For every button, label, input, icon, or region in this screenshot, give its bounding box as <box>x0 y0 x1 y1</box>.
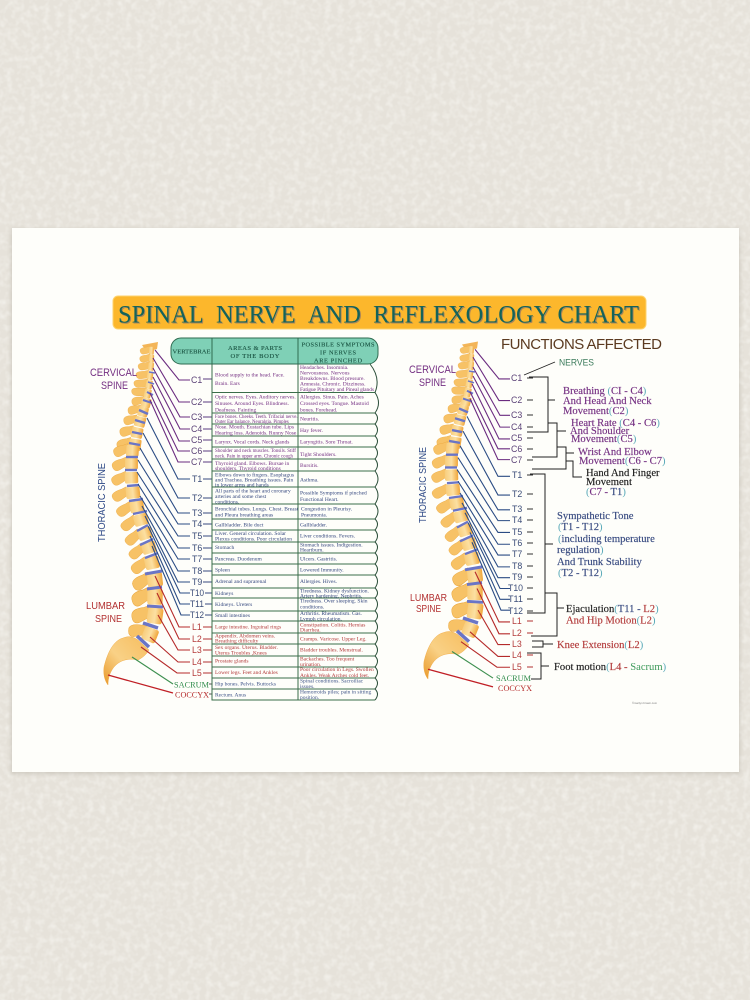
label: cervical spine left: CERVICAL <box>90 367 137 379</box>
table text: cervical rows: bones. Forehead. <box>300 408 338 414</box>
label: cervical spine right: CERVICAL <box>409 364 456 376</box>
table text: thoracic rows: Bronchial tubes. Lungs. Chest. Breast <box>215 506 299 512</box>
left vertebra labels: L5 <box>192 668 202 678</box>
function: wrist and elbow: Movement(C6 - C7) <box>579 456 666 467</box>
left spine illustration <box>104 342 164 685</box>
table header: ARE PINCHED <box>314 358 362 364</box>
function: hand and finger <box>586 468 660 498</box>
table text: thoracic rows: arteries and some chest <box>215 494 267 500</box>
table grid <box>212 364 375 700</box>
right vertebra labels: T8 <box>512 561 522 571</box>
table text: cervical rows <box>215 365 374 472</box>
table text: lumbar and sacral rows: Appendix. Abdomen veins. <box>215 634 276 640</box>
label: lumbar spine right: LUMBAR <box>410 593 447 604</box>
table text: cervical rows: shoulders. Thyroid conditions <box>215 466 281 472</box>
left vertebra labels: COCCYX <box>175 690 209 700</box>
table text: lumbar and sacral rows: Bladder troubles. Menstrual. <box>300 648 364 654</box>
label: lumbar spine left <box>86 600 125 625</box>
left vertebra labels: T3 <box>192 508 202 518</box>
right vertebra labels: T5 <box>512 527 522 537</box>
table text: thoracic rows <box>215 472 369 622</box>
function: breathing: Movement(C2) <box>563 406 629 417</box>
table text: cervical rows: Hay fever. <box>300 427 324 434</box>
left vertebra labels: T4 <box>192 519 202 529</box>
table text: thoracic rows: Small intestines <box>215 613 250 619</box>
right vertebra labels: L2 <box>512 628 522 638</box>
right vertebra labels: T6 <box>512 538 522 548</box>
table text: thoracic rows: Allergies. Hives. <box>300 579 338 585</box>
table text: cervical rows: Allergies. Sinus. Pain. Aches <box>300 394 364 400</box>
left vertebra labels: C4 <box>191 424 202 434</box>
table text: cervical rows: Shoulder and neck muscles. Tonsils. Stiff <box>215 449 296 454</box>
table text: thoracic rows: Possible Symptoms if pinched <box>300 490 367 496</box>
label: lumbar spine right: SPINE <box>416 604 441 615</box>
function: breathing: And Head And Neck <box>563 396 652 407</box>
table text: thoracic rows: Tiredness. Over sleeping. Skin <box>300 598 368 604</box>
label: cervical spine left <box>90 367 137 392</box>
table text: cervical rows: Crossed eyes. Tongue. Mastoid <box>300 401 369 407</box>
heading: functions affected: FUNCTIONS AFFECTED <box>501 336 662 353</box>
table: areas and symptoms: Hemorroids piles; pain in sitting <box>300 690 371 696</box>
table text: thoracic rows: Functional Heart. <box>300 497 339 503</box>
table text: lumbar and sacral rows: Cramps. Varicose. Upper Leg. <box>300 636 367 642</box>
table text: thoracic rows: Kidneys. Ureters <box>215 602 252 608</box>
table text: lumbar and sacral rows: Diarrhea. <box>300 628 321 634</box>
table text: thoracic rows: All parts of the heart and coronary <box>215 488 291 494</box>
table text: thoracic rows: Pancreas. Duodenum <box>215 556 262 562</box>
right spine illustration <box>424 342 484 679</box>
label: thoracic spine right: THORACIC SPINE <box>417 447 429 523</box>
left vertebra labels: T10 <box>190 588 204 598</box>
left vertebra labels: L4 <box>192 657 202 667</box>
function: breathing <box>563 386 652 417</box>
table text: cervical rows: Breakdowns. Blood pressure. <box>300 376 365 382</box>
table text: thoracic rows: Asthma. <box>300 478 319 484</box>
table text: lumbar and sacral rows: Uterus Troubles ,Knees <box>215 650 267 656</box>
table: areas and symptoms: issues. <box>300 684 315 690</box>
table text: cervical rows: Deafness. Fainting <box>215 406 256 414</box>
right vertebra labels: L4 <box>512 650 522 660</box>
table text: thoracic rows: and Pleura breathing areas <box>215 512 273 518</box>
table text: cervical rows: Optic nerves. Eyes. Auditory nerves. <box>215 394 296 400</box>
table header: AREAS & PARTS <box>228 345 282 352</box>
left vertebra labels: T6 <box>192 543 202 553</box>
right vertebra labels: C6 <box>511 444 522 454</box>
table text: thoracic rows: Elbows down to fingers. Esophagus <box>215 472 294 478</box>
small credit: ©martyn brown.com <box>632 701 658 705</box>
right vertebra labels: T7 <box>512 549 522 559</box>
table text: thoracic rows: Pneumonia. <box>301 512 328 518</box>
function: ejaculation and hip motion <box>566 604 659 626</box>
right vertebra labels <box>496 373 532 693</box>
title banner: SPINAL NERVE AND REFLEXOLOGY CHART <box>119 302 640 330</box>
function: ejaculation and hip motion: Ejaculation(T11 - L2) <box>566 604 659 615</box>
table text: thoracic rows: Ulcers. Gastritis. <box>300 556 338 562</box>
function: heart rate: Heart Rate (C4 - C6) <box>571 418 660 429</box>
table text: lumbar and sacral rows: Ankles. Weak Arches cold feet. <box>300 672 370 679</box>
table text: thoracic rows: Congestion in Pleurisy. <box>301 506 353 512</box>
left vertebra labels: C7 <box>191 457 202 467</box>
function: sympathetic tone: regulation) <box>557 545 604 556</box>
left vertebra labels: SACRUM <box>174 680 209 690</box>
table text: cervical rows: Amnesia. Chronic. Dizziness. <box>300 382 366 388</box>
left vertebra labels: L3 <box>192 645 202 655</box>
right nerve lines <box>428 349 510 687</box>
table text: lumbar and sacral rows: Prostate glands <box>215 658 248 664</box>
left vertebra labels: C1 <box>191 375 202 385</box>
right vertebra labels: T1 <box>512 470 522 480</box>
label: thoracic spine left: THORACIC SPINE <box>96 463 108 542</box>
function: sympathetic tone: (T2 - T12) <box>558 568 603 579</box>
table: areas and symptoms <box>171 338 378 701</box>
right vertebra labels: T9 <box>512 572 522 582</box>
table text: thoracic rows: Gallbladder. <box>300 522 328 528</box>
left vertebra labels: C2 <box>191 397 202 407</box>
table text: cervical rows: Face bones. Cheeks. Teeth. Trifacial nerve. <box>215 415 298 420</box>
table text: thoracic rows: Spleen <box>215 568 230 574</box>
table header <box>171 338 378 364</box>
table text: cervical rows: Thyroid gland. Elbows. Bursae in <box>215 461 289 467</box>
table text: cervical rows: Larynx. Vocal cords. Neck glands <box>215 440 289 446</box>
left vertebra labels <box>174 375 212 700</box>
left vertebra labels: L1 <box>192 622 202 632</box>
left vertebra labels: T8 <box>192 566 202 576</box>
table header: IF NERVES <box>320 350 356 356</box>
function: sympathetic tone: Sympathetic Tone <box>557 511 634 522</box>
label: lumbar spine left: LUMBAR <box>86 600 125 612</box>
table header: POSSIBLE SYMPTOMS <box>302 342 375 348</box>
table text: cervical rows: Headaches. Insomnia. <box>300 365 349 371</box>
left vertebra labels: T9 <box>192 577 202 587</box>
right vertebra labels: C4 <box>511 422 522 432</box>
table text: thoracic rows: and Trachea. Breathing issues. Pain <box>215 478 293 484</box>
table text: lumbar and sacral rows <box>215 622 374 679</box>
table: areas and symptoms: Hip bones. Pelvis. Buttocks <box>215 682 276 688</box>
table text: thoracic rows: Stomach issues. Indigestion. <box>300 542 363 548</box>
label: lumbar spine right <box>410 593 447 615</box>
right vertebra labels: T11 <box>508 594 523 604</box>
right vertebra labels: L1 <box>512 616 522 626</box>
table text: thoracic rows: Artery hardening. Nephritis. <box>300 594 363 600</box>
table text: thoracic rows: Kidneys <box>215 591 233 597</box>
function: hand and finger: (C7 - T1) <box>586 487 626 498</box>
left nerve lines <box>108 350 190 693</box>
table text: thoracic rows: Liver conditions. Fevers. <box>300 534 356 540</box>
right vertebra labels: T10 <box>508 583 523 593</box>
table header: VERTEBRAE <box>172 348 211 356</box>
left vertebra labels: C6 <box>191 446 202 456</box>
table text: cervical rows: Blood supply to the head. Face. <box>215 372 285 378</box>
right vertebra labels: T3 <box>512 504 522 514</box>
table text: cervical rows: Hearing loss. Adenoids. Runny Nose <box>215 430 297 436</box>
table text: cervical rows: neck. Pain in upper arm. Chronic cough <box>215 454 294 460</box>
table text: lumbar and sacral rows: Poor circulation in Legs. Swollen <box>300 667 374 673</box>
table: areas and symptoms: position. <box>300 695 320 701</box>
nerves callout <box>524 358 594 375</box>
left vertebra labels: T2 <box>192 493 202 503</box>
label: lumbar spine left: SPINE <box>95 613 122 625</box>
left vertebra labels: C5 <box>191 435 202 445</box>
function labels <box>554 386 667 673</box>
function: hand and finger: Movement <box>586 477 632 488</box>
function: sympathetic tone: (including temperature <box>558 534 655 545</box>
table text: lumbar and sacral rows: Constipation. Colitis. Hernias <box>300 622 365 628</box>
table: areas and symptoms: Rectum. Anus <box>215 692 246 698</box>
label: cervical spine right: SPINE <box>419 377 446 389</box>
function brackets <box>527 377 582 679</box>
table text: thoracic rows: Lymph circulation. <box>300 616 342 622</box>
left vertebra labels: T5 <box>192 531 202 541</box>
table text: thoracic rows: conditions. <box>300 604 325 610</box>
function: wrist and elbow <box>578 447 666 467</box>
nerves callout: NERVES <box>559 358 594 368</box>
table text: cervical rows: Fatigue Pituitary and Pineal glands <box>300 387 374 393</box>
table text: cervical rows: Sinuses. Around Eyes. Blindness. <box>215 401 290 407</box>
function: sympathetic tone: (T1 - T12) <box>558 522 603 533</box>
table text: cervical rows: Nervousness. Nervous <box>300 370 350 376</box>
table text: thoracic rows: in lower arms and hands <box>215 482 269 488</box>
function: breathing: Breathing (CI - C4) <box>563 386 647 397</box>
table header: OF THE BODY <box>230 353 280 360</box>
right vertebra labels: C2 <box>511 395 522 405</box>
table text: cervical rows: Tight Shoulders. <box>300 452 337 458</box>
table text: cervical rows: Nose. Mouth. Eustachian tube. Lips <box>215 424 294 430</box>
label: cervical spine right <box>409 364 456 389</box>
table text: lumbar and sacral rows: Sex organs. Uterus. Bladder. <box>215 645 278 651</box>
right vertebra labels: C1 <box>511 373 522 383</box>
right vertebra labels: L5 <box>512 662 522 672</box>
right vertebra labels: T2 <box>512 489 522 499</box>
table text: thoracic rows: Adrenal and suprarenal <box>215 579 267 585</box>
table: areas and symptoms: Spinal conditions. Sacroiliac <box>300 678 364 684</box>
table text: thoracic rows: Plexus conditions. Poor circulation <box>215 536 292 542</box>
table text: thoracic rows: Gallbladder. Bile duct <box>215 522 264 528</box>
left vertebra labels: T7 <box>192 554 202 564</box>
table text: thoracic rows: Heartburn. <box>300 548 324 554</box>
table text: thoracic rows: Tiredness. Kidney dysfunction. <box>300 588 369 594</box>
left vertebra labels: C3 <box>191 412 202 422</box>
table scalloped right edge <box>370 364 378 700</box>
table text: lumbar and sacral rows: Large intestine. Inguinal rings <box>215 624 281 630</box>
left vertebra labels: T1 <box>192 474 202 484</box>
function: hand and finger: Hand And Finger <box>586 468 660 479</box>
left vertebra labels: T11 <box>190 599 204 609</box>
function: ejaculation and hip motion: And Hip Motion(L2) <box>566 616 656 626</box>
poster sheet <box>11 228 740 774</box>
function: wrist and elbow: Wrist And Elbow <box>578 447 652 458</box>
right vertebra labels: C3 <box>511 410 522 420</box>
function: sympathetic tone <box>557 511 655 579</box>
table text: cervical rows: Outer Ear balance. Neuralgia. Pimples <box>215 420 289 425</box>
table text: thoracic rows: Liver. General circulation. Solar <box>215 531 286 537</box>
table text: thoracic rows: Stomach <box>215 545 234 551</box>
table text: thoracic rows: conditions. <box>215 500 240 506</box>
right vertebra labels: C7 <box>511 455 522 465</box>
right vertebra labels: SACRUM <box>496 673 531 683</box>
label: cervical spine left: SPINE <box>101 380 128 392</box>
function: heart rate: And Shoulder <box>570 426 630 437</box>
function: heart rate: Movement(C5) <box>571 434 637 445</box>
table text: cervical rows: Bursitis. <box>300 463 319 469</box>
function: foot motion: Foot motion(L4 - Sacrum) <box>554 662 667 673</box>
table text: cervical rows: Brain. Ears <box>215 381 240 387</box>
function: heart rate <box>570 418 660 445</box>
right vertebra labels: T12 <box>508 606 523 616</box>
right vertebra labels: C5 <box>511 433 522 443</box>
table text: thoracic rows: Lowered Immunity. <box>300 568 344 574</box>
function: sympathetic tone: And Trunk Stability <box>557 557 642 568</box>
left vertebra labels: L2 <box>192 634 202 644</box>
right vertebra labels: COCCYX <box>498 683 532 693</box>
table text: lumbar and sacral rows: Breathing difficulty <box>215 638 259 644</box>
function: knee extension: Knee Extension(L2) <box>557 640 644 651</box>
left vertebra labels: T12 <box>190 610 204 620</box>
right vertebra labels: L3 <box>512 639 522 649</box>
table text: cervical rows: Laryngitis. Sore Throat. <box>300 440 353 446</box>
table text: thoracic rows: Arthritis. Rheumatism. Gas. <box>300 611 362 617</box>
title banner: SPINAL NERVE AND REFLEXOLOGY CHART <box>118 302 639 328</box>
right vertebra labels: T4 <box>512 515 522 525</box>
table text: lumbar and sacral rows: Backaches. Too frequent <box>300 656 355 662</box>
table text: lumbar and sacral rows: Lower legs. Feet and Ankles <box>215 670 278 676</box>
table text: lumbar and sacral rows: urination. <box>300 662 322 668</box>
table text: cervical rows: Neuritis. <box>300 416 320 422</box>
